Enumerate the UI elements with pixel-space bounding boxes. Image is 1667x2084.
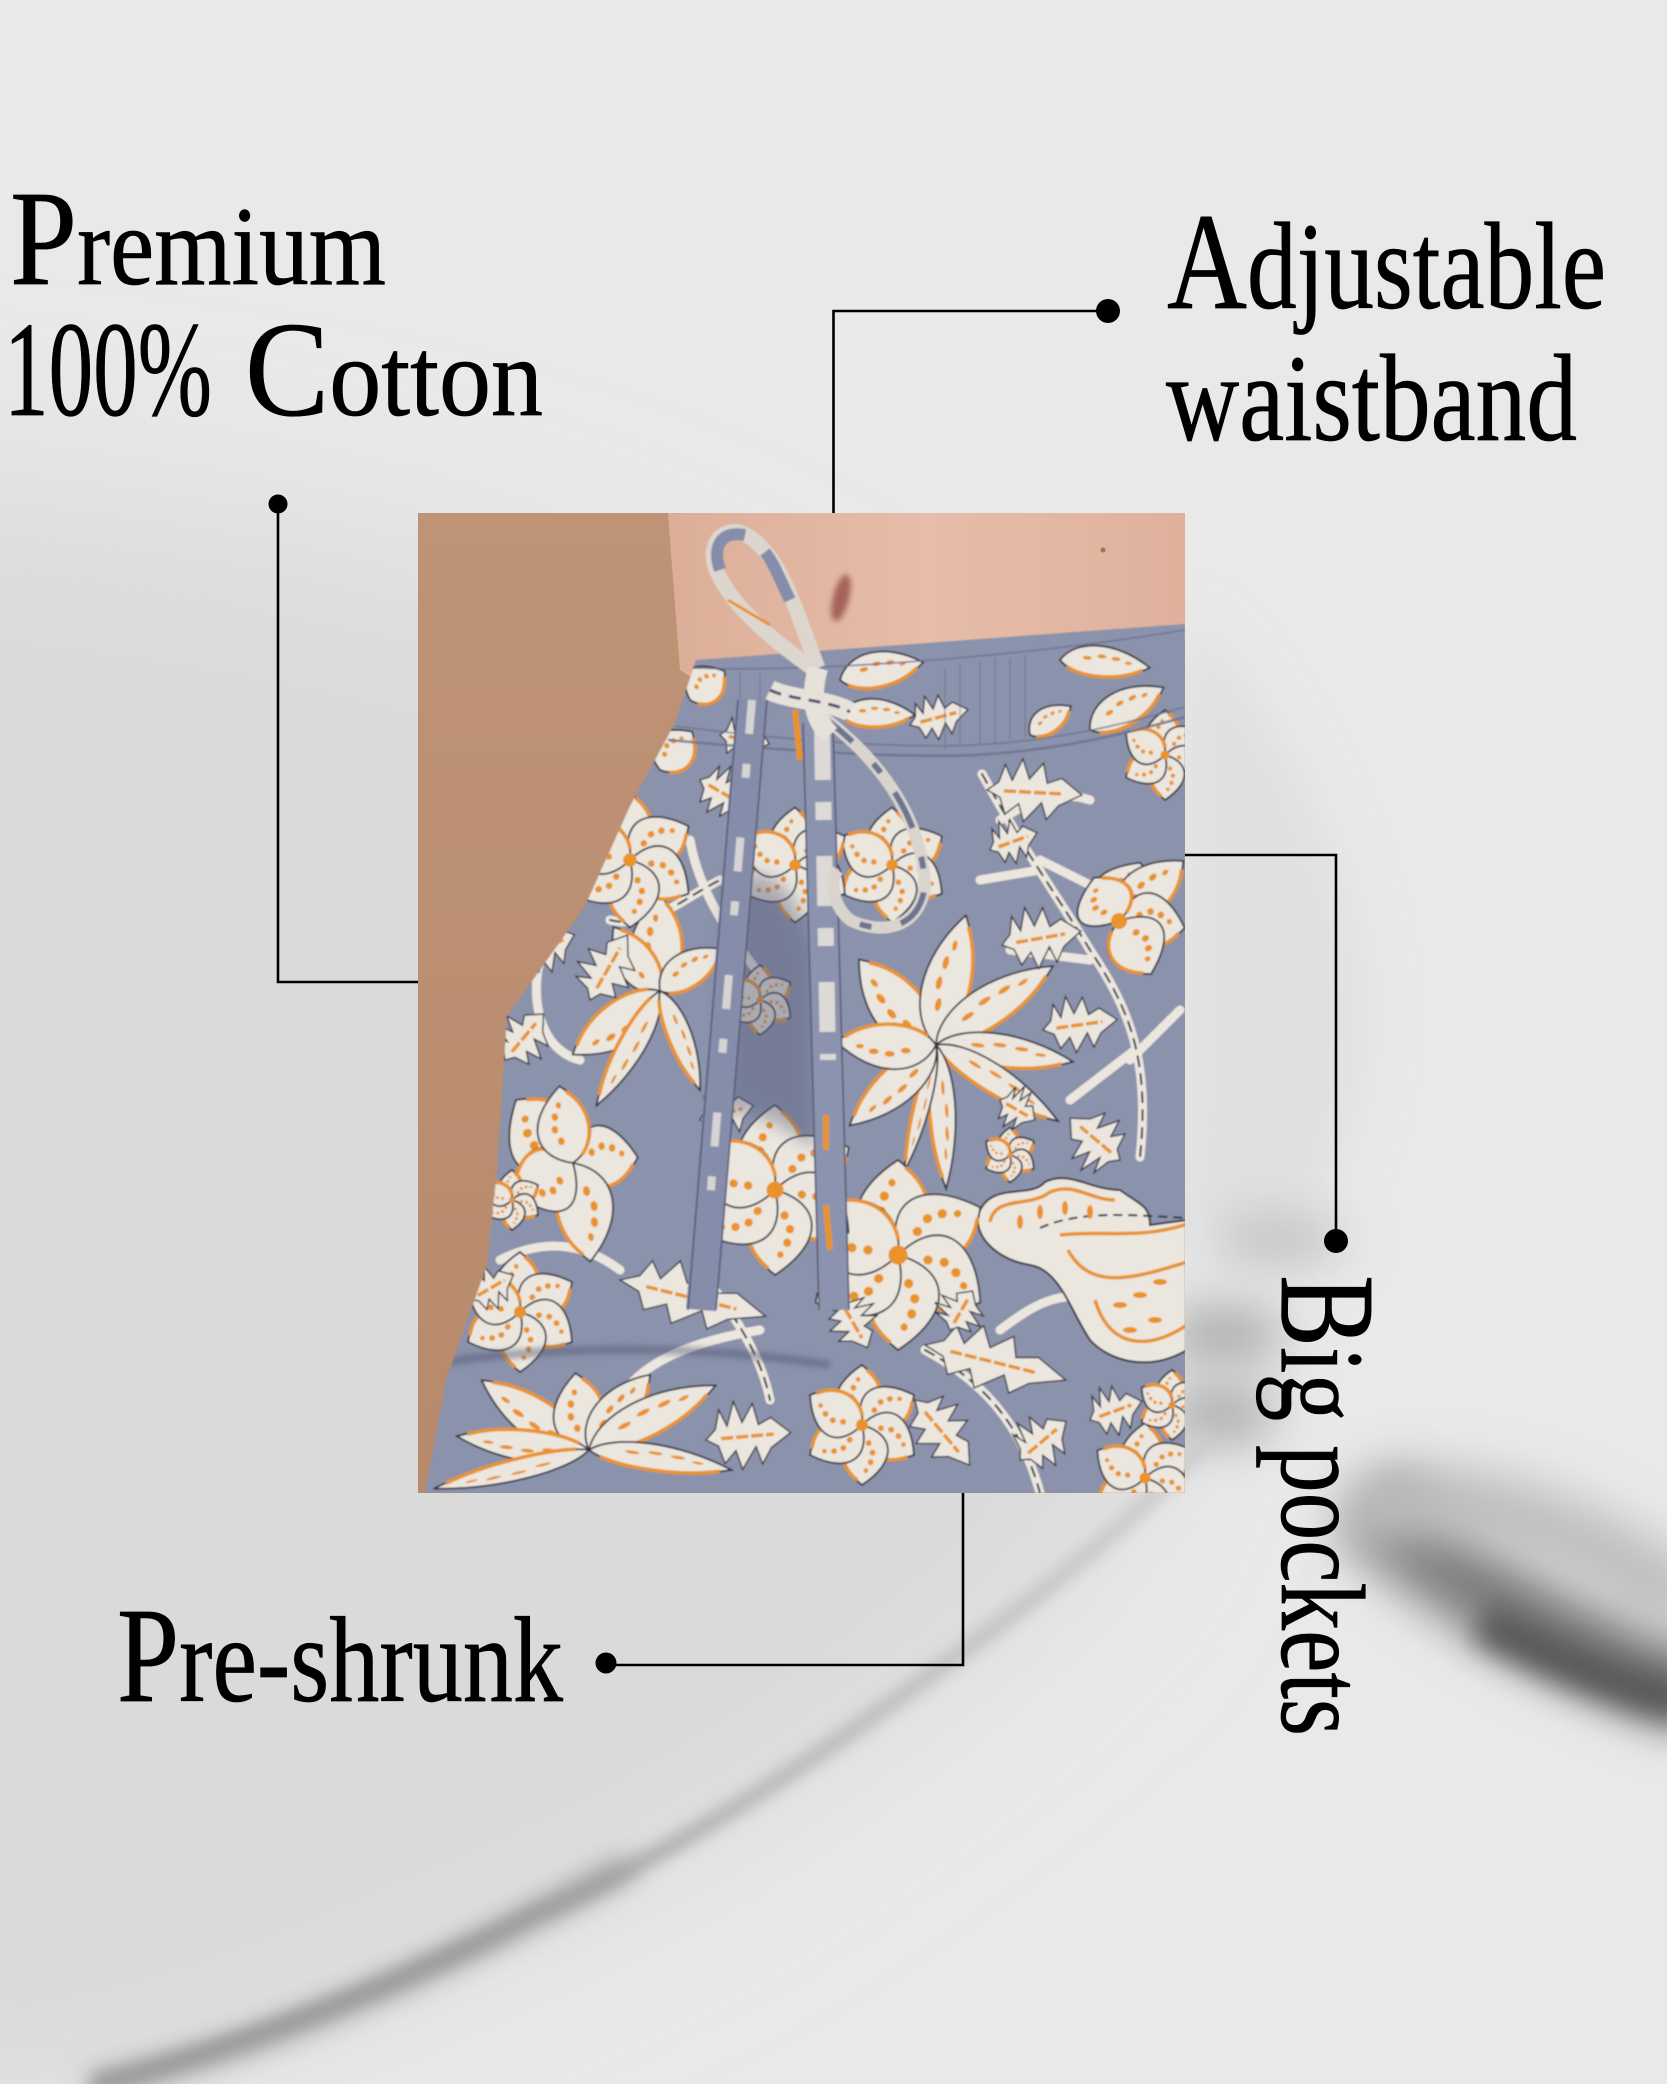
large paisley leaf xyxy=(978,1178,1187,1362)
leader line and dot xyxy=(596,1493,963,1674)
vines xyxy=(500,774,1180,1493)
flower top right xyxy=(1065,841,1198,988)
flower left xyxy=(570,899,717,1108)
callout: Premium 100% Cotton xyxy=(4,164,543,982)
text: Premium 100% Cotton: Premium xyxy=(10,164,386,314)
text: Premium 100% Cotton: 100% xyxy=(4,295,212,445)
serrated leaves xyxy=(458,757,1150,1482)
drawstring bow loops and knot xyxy=(713,532,925,928)
callout: Adjustable waistband xyxy=(834,185,1606,513)
flower lower left lobed xyxy=(508,1084,640,1263)
leader line and dot xyxy=(268,494,418,982)
text: Adjustable waistband: waistband xyxy=(1166,330,1577,467)
background: soft grey shadows xyxy=(0,504,1667,2084)
text: Premium 100% Cotton: Cotton xyxy=(245,295,543,445)
elasticated waistband xyxy=(668,630,1185,756)
text: Pre-shrunk: Pre-shrunk xyxy=(117,1581,563,1731)
waistband print xyxy=(640,643,1171,783)
flower bottom left xyxy=(432,1372,734,1490)
text: Premium 100% Cotton xyxy=(4,164,543,445)
callout: Big pockets xyxy=(1185,855,1402,1736)
text: Adjustable waistband xyxy=(1166,185,1606,467)
leader line and dot xyxy=(1185,855,1348,1253)
callout: Pre-shrunk xyxy=(117,1493,963,1731)
flower center xyxy=(835,909,1075,1189)
leader line and dot xyxy=(834,299,1120,513)
product photo: patterned cotton pants xyxy=(418,513,1214,1533)
text: Big pockets rotated: Big pockets xyxy=(1252,1275,1402,1736)
drawstring shadow and straps xyxy=(688,700,849,1310)
body fold shadow xyxy=(446,1350,830,1365)
skin and navel xyxy=(668,513,1185,680)
fabric with floral print xyxy=(425,532,1214,1533)
small flowers xyxy=(455,710,1214,1533)
